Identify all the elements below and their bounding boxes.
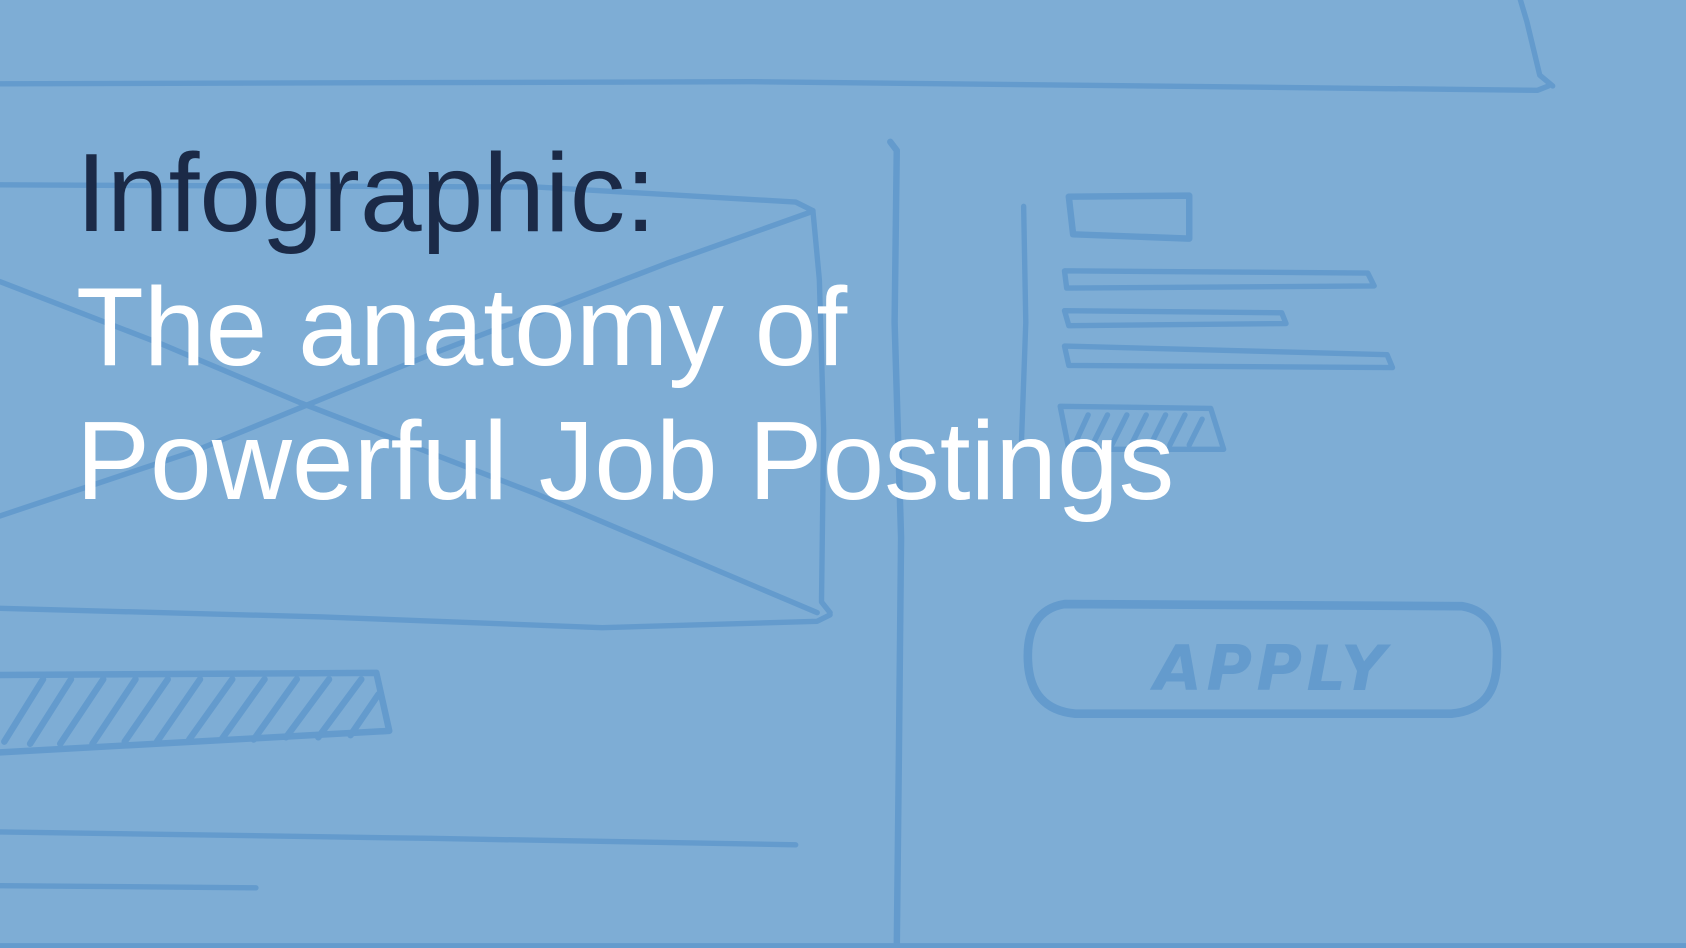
hatched bar left [0,673,389,752]
bottom text lines [0,832,1686,946]
title line 2: The anatomy of [76,265,847,389]
image placeholder box [0,185,830,628]
title line 3: Powerful Job Postings [76,399,1174,523]
small rectangle [1069,196,1189,239]
apply button: APPLY [1149,632,1392,705]
text bars [1065,271,1392,368]
vertical divider [890,142,901,948]
apply button [1028,604,1497,714]
small vertical line [1021,206,1026,441]
title [76,131,1174,523]
title line 1: Infographic: [76,131,656,255]
top border line [0,0,1553,90]
hatched bar right [1060,406,1224,449]
